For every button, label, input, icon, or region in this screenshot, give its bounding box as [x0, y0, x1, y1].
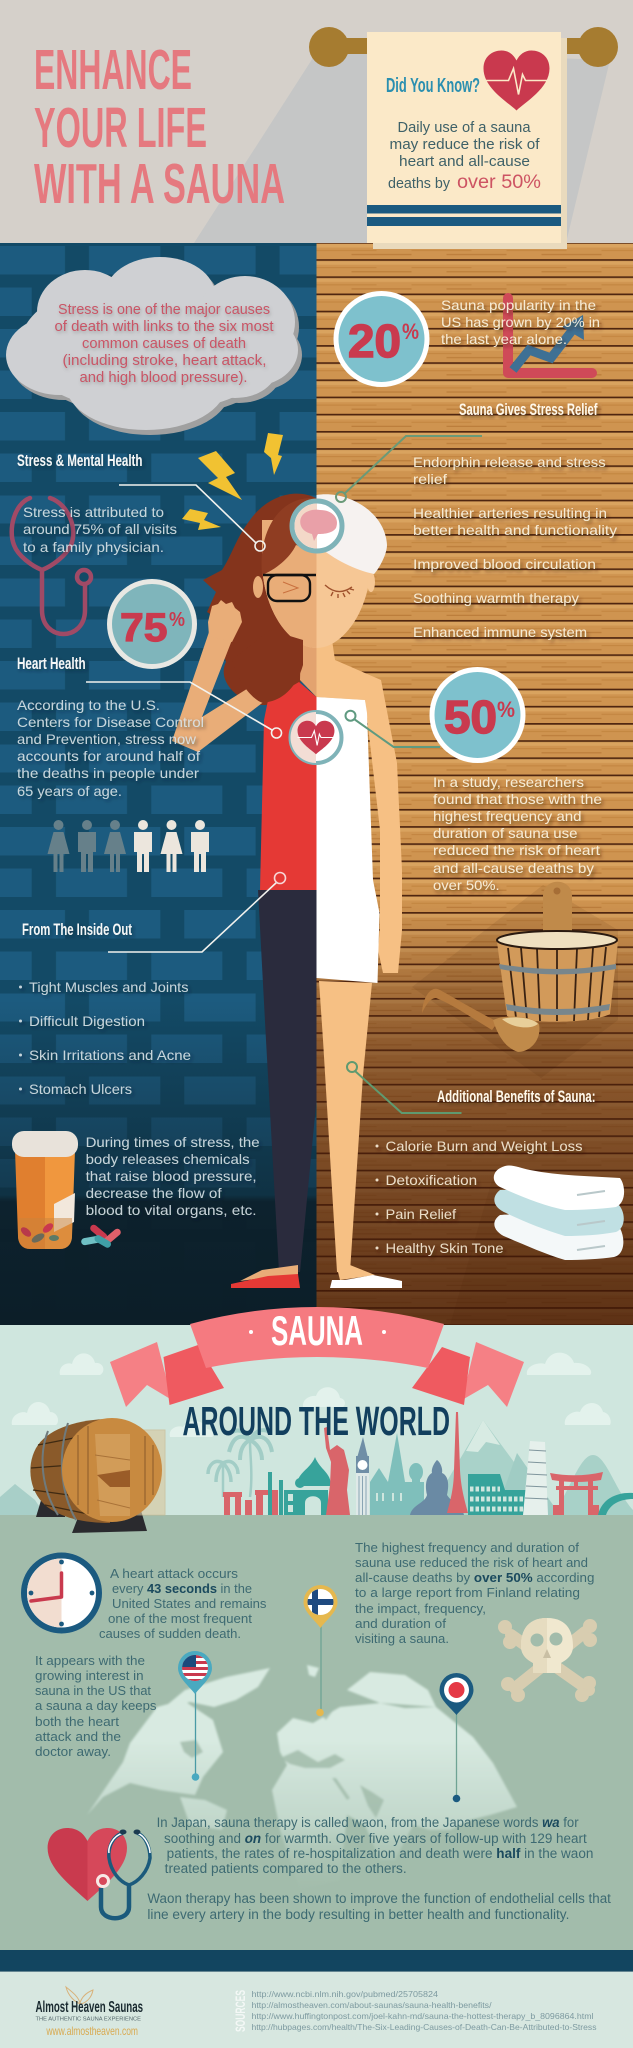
background clouds	[12, 1353, 611, 1437]
map: mediterranean and inland seas	[180, 1702, 384, 1818]
japan waon therapy text: line every artery in the body resulting in better health and functionality.	[147, 1907, 569, 1922]
left foot and red shoe	[231, 1265, 300, 1288]
stress relief list: relief	[413, 471, 447, 487]
50 percent badge	[430, 667, 526, 763]
additional benefits bullet list	[376, 1138, 582, 1256]
panel: footer	[0, 1972, 633, 2048]
left hair front	[262, 498, 316, 575]
finland report text: and duration of	[355, 1616, 446, 1631]
panel: green ground	[0, 1515, 633, 1950]
arched bridge	[598, 1493, 633, 1515]
us growing interest text: It appears with the	[35, 1653, 145, 1668]
japan waon therapy text: Waon therapy has been shown to improve the function of endothelial cells that	[147, 1891, 611, 1906]
us growing interest text: attack and the	[35, 1729, 121, 1744]
heart attack text: United States and remains	[112, 1596, 267, 1611]
logo tagline: THE AUTHENTIC SAUNA EXPERIENCE	[36, 2017, 141, 2023]
ears	[253, 572, 375, 598]
study text: In a study, researchers	[433, 774, 584, 790]
icon: growth chart	[508, 298, 592, 373]
ribbon right fold	[412, 1347, 470, 1405]
20 percent badge: 20	[348, 315, 401, 367]
stress chemicals text	[86, 1134, 260, 1218]
icon: clock	[24, 1556, 99, 1630]
barrel interior	[95, 1434, 130, 1516]
additional benefits bullet list: Healthy Skin Tone	[386, 1240, 504, 1256]
stress relief list: Enhanced immune system	[413, 624, 587, 640]
header background	[0, 0, 633, 243]
cloud shadow	[10, 262, 302, 435]
stress chemicals text: decrease the flow of	[86, 1185, 222, 1201]
heart health text: 65 years of age.	[17, 783, 122, 799]
finland report text: The highest frequency and duration of	[355, 1540, 579, 1555]
stress relief list: Healthier arteries resulting in	[413, 505, 607, 521]
study text: highest frequency and	[433, 808, 582, 824]
connector: heart health	[86, 682, 282, 738]
heart attack text	[99, 1566, 267, 1641]
panel: wood wall sauna side	[316, 243, 633, 1325]
icon: barrel sauna	[30, 1418, 165, 1533]
title	[34, 38, 285, 216]
sauna popularity text: the last year alone.	[441, 331, 567, 347]
icon: skull and crossbones	[498, 1618, 597, 1702]
left arm raised	[172, 600, 270, 752]
connector: additional benefits	[347, 1062, 462, 1113]
stress chemicals text: blood to vital organs, etc.	[86, 1202, 257, 1218]
japan waon therapy text: treated patients compared to the others.	[165, 1861, 407, 1876]
icon: heart with stethoscope	[48, 1828, 150, 1918]
stress visits text: to a family physician.	[23, 539, 164, 555]
inside out bullet list: Difficult Digestion	[29, 1013, 145, 1029]
brain badge	[292, 501, 342, 551]
study text: reduced the risk of heart	[433, 842, 600, 858]
75 percent badge: %	[169, 609, 185, 631]
neck and shoulders left	[300, 640, 316, 697]
finland report text: visiting a sauna.	[355, 1631, 449, 1646]
connector: stress and mental health	[119, 485, 265, 551]
logo website: www.almostheaven.com	[46, 2024, 138, 2038]
did you know text: Daily use of a sauna	[398, 119, 531, 136]
japan waon therapy text	[147, 1815, 611, 1922]
header light shadow	[194, 50, 610, 243]
sources list: http://www.huffingtonpost.com/joel-kahn-md/sauna-the-hottest-therapy_b_8096864.html	[252, 2011, 594, 2021]
cloud text: Stress is one of the major causes	[58, 302, 270, 318]
additional benefits bullet list: Pain Relief	[386, 1206, 456, 1222]
did you know text: over 50%	[457, 172, 541, 193]
icon: pill bottle	[12, 1131, 78, 1249]
title: ENHANCE	[34, 38, 192, 102]
heading: from the inside out: From The Inside Out	[22, 920, 132, 939]
ribbon main	[190, 1307, 444, 1368]
heart attack text: one of the most frequent	[108, 1611, 252, 1626]
heart attack text: every 43 seconds in the	[112, 1581, 252, 1596]
background mountains	[0, 1420, 633, 1515]
us growing interest text: growing interest in	[35, 1668, 144, 1683]
map: arctic canada and greenland	[161, 1668, 270, 1710]
icon: sauna bucket	[497, 882, 618, 1022]
barrel body	[30, 1419, 110, 1523]
world map	[87, 1665, 517, 1890]
stress visits text: around 75% of all visits	[23, 521, 177, 537]
landmark skyline	[223, 1412, 633, 1515]
sources list	[252, 1989, 596, 2032]
map pin: united states	[178, 1651, 212, 1781]
right arm and shoulder	[316, 640, 402, 973]
turban towel	[316, 494, 387, 574]
lightning bolts	[182, 433, 283, 530]
did you know text: heart and all-cause	[399, 153, 530, 170]
inside out bullet list: Stomach Ulcers	[29, 1081, 132, 1097]
connector: stress relief	[336, 436, 482, 502]
panel: around the world sky	[0, 1325, 633, 1515]
dark leggings	[258, 890, 316, 1272]
stress chemicals text: that raise blood pressure,	[86, 1168, 257, 1184]
logo name: Almost Heaven Saunas	[36, 1999, 143, 2016]
map pin: japan	[440, 1673, 474, 1802]
right foot and white shoe	[330, 1265, 402, 1288]
map: central america	[180, 1797, 227, 1830]
icon: stacked towels	[494, 1165, 624, 1260]
did you know text	[388, 119, 541, 193]
us growing interest text: sauna in the US that	[35, 1683, 151, 1698]
japan waon therapy text: soothing and on for warmth. Over five years of follow-up with 129 heart	[164, 1831, 587, 1846]
did you know text: deaths by	[388, 175, 450, 192]
colosseum	[468, 1474, 537, 1515]
stress visits text	[23, 504, 177, 555]
finland report text: to a large report from Finland relating	[355, 1585, 580, 1600]
heading: around the world: AROUND THE WORLD	[182, 1398, 450, 1444]
towel body	[367, 32, 567, 249]
inside out bullet list: Tight Muscles and Joints	[29, 979, 188, 995]
japan waon therapy text: In Japan, sauna therapy is called waon, from the Japanese words wa for	[157, 1815, 579, 1830]
us growing interest text: both the heart	[35, 1714, 119, 1729]
buddha	[410, 1460, 464, 1515]
sources list: http://hubpages.com/health/The-Six-Leading-Causes-of-Death-Can-Be-Attributed-to-Stress	[252, 2022, 596, 2032]
20 percent badge: %	[402, 319, 419, 344]
title: WITH A SAUNA	[34, 152, 285, 216]
sauna popularity text: US has grown by 20% in	[441, 314, 600, 330]
cloud text: common causes of death	[82, 336, 246, 352]
palm trees	[208, 1430, 272, 1497]
hair over shoulder	[232, 630, 303, 703]
map: scandinavia	[307, 1665, 319, 1677]
closed eye	[325, 585, 354, 598]
ribbon right tail	[462, 1342, 524, 1407]
stress relief list	[413, 454, 617, 640]
glasses	[263, 575, 316, 601]
us growing interest text: a sauna a day keeps	[35, 1698, 157, 1713]
kremlin domes	[370, 1433, 424, 1515]
white towel wrap	[316, 697, 380, 983]
heading: stress and mental health: Stress & Mental Health	[17, 451, 142, 470]
ribbon left tail	[110, 1342, 172, 1407]
finland report text: the impact, frequency,	[355, 1601, 486, 1616]
connector: fifty percent	[346, 711, 440, 747]
additional benefits bullet list: Calorie Burn and Weight Loss	[386, 1138, 582, 1154]
stress cloud callout	[6, 257, 302, 435]
icon: loose pills	[81, 1223, 122, 1249]
study text: and all-cause deaths by	[433, 860, 594, 876]
50 percent badge: 50	[444, 691, 497, 743]
heart health text: accounts for around half of	[17, 748, 200, 764]
stress chemicals text: body releases chemicals	[86, 1151, 250, 1167]
bare leg	[319, 981, 372, 1272]
company logo	[36, 1987, 143, 2038]
barrel stands	[36, 1497, 147, 1533]
stress relief list: Soothing warmth therapy	[413, 590, 579, 606]
banner word sauna: SAUNA	[271, 1307, 363, 1354]
map: north america	[87, 1700, 223, 1815]
did you know heading: Did You Know?	[386, 75, 480, 97]
cloud text: (including stroke, heart attack,	[62, 353, 266, 369]
sources list: http://www.ncbi.nlm.nih.gov/pubmed/25705824	[252, 1989, 438, 1999]
did you know hanging towel	[309, 27, 618, 249]
torii gate	[550, 1472, 603, 1515]
sauna popularity text: Sauna popularity in the	[441, 297, 596, 313]
finland report text: all-cause deaths by over 50% according	[355, 1570, 594, 1585]
heart attack text: A heart attack occurs	[110, 1566, 239, 1581]
map: northern russia	[347, 1672, 436, 1707]
heart badge	[290, 712, 342, 763]
people pictogram: half of deaths	[48, 820, 209, 872]
stress relief list: better health and functionality	[413, 522, 617, 538]
heart health text	[17, 697, 204, 799]
panel: brick wall stress side	[0, 243, 316, 1325]
finland report text	[355, 1540, 594, 1646]
map: eurasia and africa	[272, 1703, 517, 1890]
heart health text: and Prevention, stress now	[17, 731, 197, 747]
heading: heart health: Heart Health	[17, 654, 86, 673]
sources label: SOURCES	[232, 1990, 248, 2032]
us growing interest text	[35, 1653, 157, 1759]
eiffel tower	[447, 1412, 468, 1513]
heart health text: Centers for Disease Control	[17, 714, 204, 730]
heart attack text: causes of sudden death.	[99, 1626, 241, 1641]
red dress half	[260, 682, 316, 890]
stonehenge	[223, 1490, 278, 1515]
did you know text: may reduce the risk of	[390, 136, 540, 153]
banner title	[110, 1307, 524, 1407]
20 percent badge	[334, 291, 430, 387]
inside out bullet list: Skin Irritations and Acne	[29, 1047, 191, 1063]
study text: over 50%.	[433, 877, 500, 893]
study text: duration of sauna use	[433, 825, 578, 841]
icon: stethoscope left	[12, 498, 91, 634]
cloud text	[54, 302, 274, 386]
title: YOUR LIFE	[34, 96, 207, 160]
heart health text: According to the U.S.	[17, 697, 160, 713]
face	[262, 520, 371, 648]
left hair back	[203, 494, 316, 705]
additional benefits bullet list: Detoxification	[386, 1172, 477, 1188]
us growing interest text: doctor away.	[35, 1744, 111, 1759]
leaning tower of pisa	[523, 1441, 548, 1515]
sauna popularity text	[441, 297, 600, 347]
connector: inside out	[108, 872, 286, 952]
barrel front	[62, 1418, 162, 1522]
stress visits text: Stress is attributed to	[23, 504, 164, 520]
heart health text: the deaths in people under	[17, 765, 199, 781]
75 percent badge	[107, 579, 197, 669]
statue of liberty	[324, 1427, 350, 1515]
big ben	[356, 1437, 369, 1515]
japan waon therapy text: patients, the rates of re-hospitalization and death were half in the waon	[167, 1846, 593, 1861]
figure: half stressed half relaxed woman	[172, 494, 402, 1288]
barrel glass door	[129, 1430, 165, 1515]
logo wings	[66, 1987, 93, 2004]
inside out bullet list	[19, 979, 191, 1097]
50 percent badge: %	[497, 697, 515, 722]
finland report text: sauna use reduced the risk of heart and	[355, 1555, 588, 1570]
stress relief list: Endorphin release and stress	[413, 454, 606, 470]
ribbon left fold	[164, 1345, 224, 1405]
map pin: finland	[304, 1585, 338, 1716]
stress relief list: Improved blood circulation	[413, 556, 596, 572]
towel rod	[309, 27, 618, 67]
banner dots	[249, 1330, 386, 1334]
towel bottom overlay	[373, 243, 567, 249]
cloud body	[6, 257, 298, 430]
study text: found that those with the	[433, 791, 602, 807]
sources list: http://almostheaven.com/about-saunas/sauna-health-benefits/	[252, 2000, 492, 2010]
stress chemicals text: During times of stress, the	[86, 1134, 260, 1150]
cloud text: of death with links to the six most	[54, 319, 274, 335]
cloud text: and high blood pressure).	[80, 370, 248, 386]
icon: ladle	[422, 989, 539, 1052]
icon: heart with pulse	[484, 50, 550, 110]
75 percent badge: 75	[120, 606, 168, 650]
study text	[433, 774, 602, 893]
taj mahal	[268, 1457, 331, 1515]
dark footer band	[0, 1950, 633, 1972]
